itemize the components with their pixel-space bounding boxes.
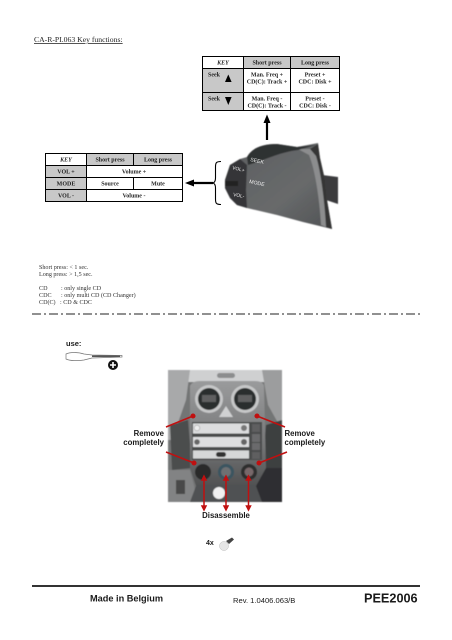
footer: made in Belgium: Made in Belgium — [90, 594, 163, 604]
notes text: Short press: < 1 sec. — [39, 265, 89, 271]
brace — [213, 162, 221, 204]
table: volume and mode keys: MODE — [57, 182, 75, 188]
icon: screwdriver — [66, 352, 122, 361]
table: volume and mode keys: VOL + — [57, 170, 75, 176]
icon: screw — [220, 538, 234, 550]
table: seek keys: CD(C): Track - — [247, 102, 287, 110]
arrow: left to volume table — [185, 180, 213, 186]
table: seek keys: CDC: Disk + — [298, 80, 332, 86]
table: seek keys: Preset - — [305, 96, 325, 102]
notes text: CD(C) — [39, 299, 56, 306]
table: volume and mode keys: VOL - — [58, 194, 74, 200]
table: seek keys: CDC: Disk - — [299, 104, 331, 110]
table: seek keys — [202, 56, 340, 110]
footer rule — [32, 585, 420, 587]
notes text: : only multi CD (CD Changer) — [61, 292, 136, 299]
table: seek keys: Short press — [252, 60, 282, 66]
table: volume and mode keys: Mute — [151, 182, 165, 188]
photo: steering wheel control: SEEK — [250, 157, 265, 166]
table: volume and mode keys: Volume - — [123, 194, 145, 200]
use label: use: — [66, 339, 81, 348]
table: volume and mode keys: Volume + — [122, 170, 147, 176]
notes text: Long press: > 1,5 sec. — [39, 272, 93, 278]
table: seek keys: Man. Freq - — [252, 96, 282, 102]
label: remove completely right: Remove — [284, 429, 315, 438]
table: volume and mode keys — [46, 154, 182, 202]
label: remove completely right — [284, 429, 326, 447]
table: volume and mode keys: KEY — [59, 158, 73, 164]
label: 4x: 4x — [206, 540, 214, 547]
icon: phillips cross — [108, 360, 118, 370]
table: seek keys: Long press — [301, 60, 330, 66]
label: remove completely left: completely — [123, 438, 165, 447]
table: seek keys: Seek — [208, 96, 221, 102]
label: remove completely left — [123, 429, 165, 447]
notes text: : CD & CDC — [60, 300, 92, 306]
footer: code: PEE2006 — [364, 592, 418, 606]
notes text: : only single CD — [61, 286, 102, 292]
table: seek keys: Man. Freq + — [251, 72, 284, 78]
notes text: CDC — [39, 293, 52, 299]
table: volume and mode keys: Long press — [144, 158, 173, 164]
arrow: up to seek table — [264, 114, 270, 140]
photo: steering wheel control: MODE — [249, 179, 266, 188]
table: volume and mode keys: Short press — [95, 158, 125, 164]
table: seek keys: Seek — [208, 72, 221, 78]
photo: dashboard with arrows — [166, 370, 287, 510]
photo: steering wheel control: VOL- — [233, 192, 245, 200]
footer: revision: Rev. 1.0406.063/B — [233, 596, 295, 605]
label: disassemble: Disassemble — [202, 511, 250, 520]
label: remove completely left: Remove — [134, 429, 165, 438]
table: volume and mode keys: Source — [101, 182, 119, 188]
photo: steering wheel control: VOL+ — [232, 165, 245, 174]
notes text: CD — [39, 286, 48, 292]
photo: steering wheel control — [225, 143, 338, 229]
table: seek keys: Preset + — [305, 72, 326, 78]
table: seek keys: CD(C): Track + — [247, 78, 288, 86]
table: seek keys: KEY — [216, 60, 230, 66]
notes text — [39, 265, 136, 306]
label: remove completely right: completely — [284, 438, 326, 447]
title: CA-R-PI.063 Key functions: — [34, 35, 123, 44]
